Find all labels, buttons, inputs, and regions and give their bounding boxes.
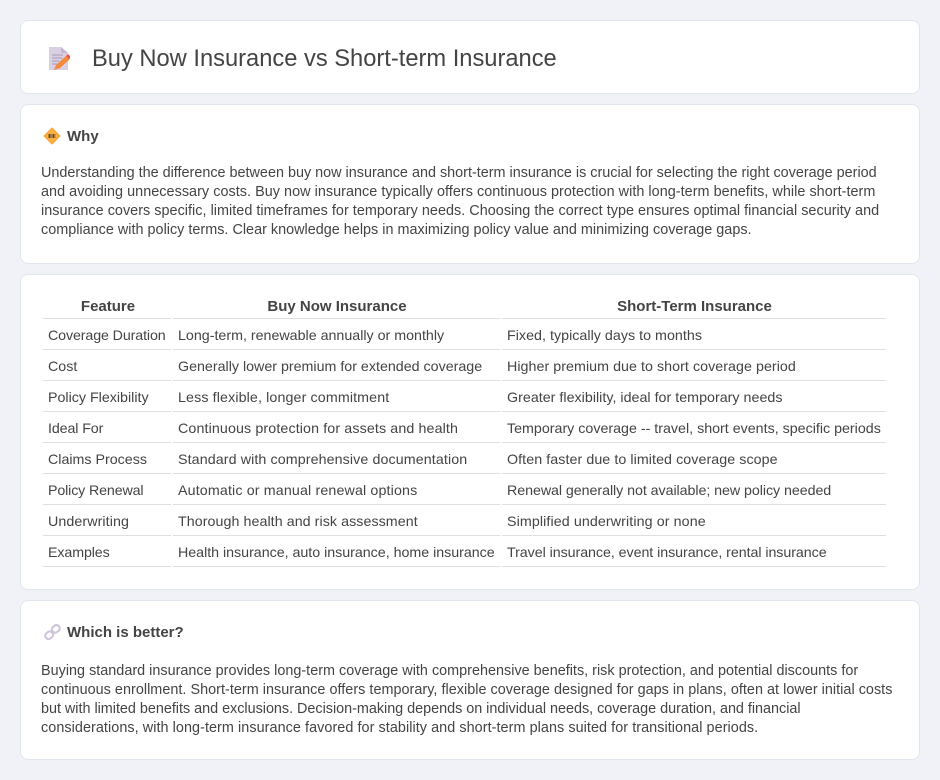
row: cost: Cost: [48, 359, 77, 375]
text block: which is better explanation: but with limited benefits and exclusions. Decision-making depends on individual needs, coverage duration, and financial: [41, 701, 801, 717]
icon: warning diamond: [44, 128, 60, 144]
row: policy renewal: Policy Renewal: [48, 483, 143, 499]
table header: Feature: [81, 298, 135, 315]
row: policy flexibility: Less flexible, longer commitment: [178, 390, 389, 406]
text block: why explanation: [41, 165, 879, 238]
row: examples: Health insurance, auto insurance, home insurance: [178, 545, 495, 561]
heading: which is better: Which is better?: [67, 624, 184, 641]
row: policy flexibility: Policy Flexibility: [48, 390, 149, 406]
text block: which is better explanation: [41, 663, 892, 736]
row: policy flexibility: Greater flexibility, ideal for temporary needs: [507, 390, 782, 406]
row: underwriting: Simplified underwriting or none: [507, 514, 706, 530]
row: claims process: Claims Process: [48, 452, 147, 468]
row: claims process: [43, 452, 886, 474]
text block: why explanation: and avoiding unnecessary costs. Buy now insurance typically offers continuous protection with long-term benefits, while short-term: [41, 184, 875, 200]
text block: which is better explanation: continuous enrollment. Short-term insurance offers temporary, flexible coverage designed for gaps in plans, often at lower initial costs: [41, 682, 892, 698]
text block: why explanation: compliance with policy terms. Clear knowledge helps in maximizing policy value and minimizing coverage gaps.: [41, 222, 752, 238]
row: cost: Higher premium due to short coverage period: [507, 359, 796, 375]
row: coverage duration: Long-term, renewable annually or monthly: [178, 328, 444, 344]
row: underwriting: Underwriting: [48, 514, 129, 530]
row: examples: Travel insurance, event insurance, rental insurance: [507, 545, 827, 561]
panel: comparison table: [20, 274, 920, 590]
row: coverage duration: Fixed, typically days to months: [507, 328, 702, 344]
row: claims process: Standard with comprehensive documentation: [178, 452, 467, 468]
row: ideal for: Temporary coverage -- travel, short events, specific periods: [507, 421, 881, 437]
title: Buy Now Insurance vs Short-term Insurance: [92, 46, 557, 72]
text block: which is better explanation: considerations, with long-term insurance favored for stability and short-term plans suited for transitional periods.: [41, 720, 758, 736]
table header: Buy Now Insurance: [267, 298, 407, 315]
row: underwriting: Thorough health and risk assessment: [178, 514, 418, 530]
icon: document with pencil: [49, 47, 70, 70]
row: underwriting: [43, 514, 886, 536]
panel: title header: [20, 20, 920, 94]
row: ideal for: Continuous protection for assets and health: [178, 421, 458, 437]
panel: why: [20, 104, 920, 264]
row: policy renewal: Renewal generally not available; new policy needed: [507, 483, 831, 499]
table header: Short-Term Insurance: [617, 298, 772, 315]
icon: chain link: [44, 624, 61, 640]
row: policy flexibility: [43, 390, 886, 412]
row: coverage duration: [43, 328, 886, 350]
row: examples: [43, 545, 886, 567]
table header: [43, 298, 886, 319]
row: examples: Examples: [48, 545, 110, 561]
text block: which is better explanation: Buying standard insurance provides long-term coverage with comprehensive benefits, risk protection, and potential discounts for: [41, 663, 858, 679]
row: cost: Generally lower premium for extended coverage: [178, 359, 482, 375]
text block: why explanation: insurance covers specific, limited timeframes for temporary needs. Choosing the correct type ensures optimal financial security and: [41, 203, 879, 219]
row: ideal for: [43, 421, 886, 443]
panel: which is better: [20, 600, 920, 760]
text block: why explanation: Understanding the difference between buy now insurance and short-term insurance is crucial for selecting the right coverage period: [41, 165, 877, 181]
row: ideal for: Ideal For: [48, 421, 103, 437]
row: cost: [43, 359, 886, 381]
row: coverage duration: Coverage Duration: [48, 328, 166, 344]
row: claims process: Often faster due to limited coverage scope: [507, 452, 778, 468]
heading: why: Why: [67, 128, 99, 145]
row: policy renewal: Automatic or manual renewal options: [178, 483, 417, 499]
row: policy renewal: [43, 483, 886, 505]
